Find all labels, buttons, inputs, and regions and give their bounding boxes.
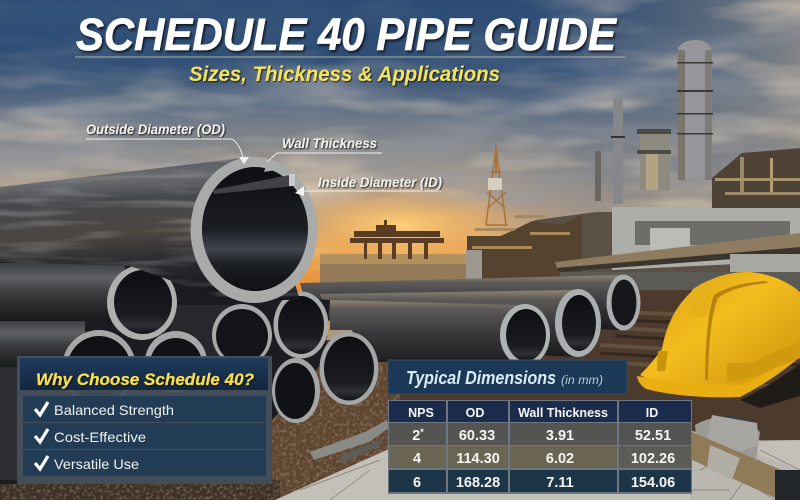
dark base behind stack xyxy=(0,255,330,484)
pipe end: NPS 4 xyxy=(212,304,272,366)
panel heading: typical dimensions: (in mm) xyxy=(561,375,603,387)
table row: NPS 2: 2 xyxy=(412,428,420,444)
pipe end: NPS 2 xyxy=(62,330,136,406)
reactor vessel xyxy=(637,129,671,190)
table row: NPS 2: 3.91 xyxy=(546,428,574,444)
table header row: NPS xyxy=(408,406,434,420)
pipe B xyxy=(320,289,601,357)
title: SCHEDULE 40 PIPE GUIDE xyxy=(76,9,618,60)
cutaway notch xyxy=(213,174,295,194)
pipe body middle xyxy=(170,305,230,365)
pipe end: NPS 7 xyxy=(272,358,320,423)
right structure xyxy=(712,148,800,208)
helmet slot xyxy=(657,351,668,371)
refinery base building xyxy=(466,212,800,290)
helmet dome xyxy=(640,272,800,391)
callout: inside diameter xyxy=(295,175,442,196)
panel heading: Why Choose Schedule 40? xyxy=(36,370,255,389)
table row: NPS 2: 52.51 xyxy=(635,428,671,444)
panel: why choose schedule 40 xyxy=(17,356,272,484)
table header row xyxy=(389,401,691,422)
panel heading: typical dimensions xyxy=(388,360,627,394)
benefit: versatile use: Versatile Use xyxy=(54,456,139,472)
main cutaway pipe xyxy=(0,155,318,305)
subtitle: Sizes, Thickness & Applications xyxy=(189,63,500,86)
panel heading: typical dimensions: Typical Dimensions xyxy=(406,368,556,388)
helmet raised rib xyxy=(689,279,714,317)
benefit: balanced strength xyxy=(23,396,266,422)
pipe end: NPS 3 xyxy=(145,331,207,393)
benefit: cost-effective xyxy=(23,423,266,449)
pliers tool xyxy=(310,420,389,463)
stack 2 xyxy=(611,96,625,204)
small pipes stack xyxy=(0,255,378,484)
table row: NPS 4: 6.02 xyxy=(546,451,574,467)
helmet shadow xyxy=(740,364,800,408)
callout: outside diameter xyxy=(86,122,249,164)
table row: NPS 6: 7.11 xyxy=(546,475,574,491)
table row: NPS 4 xyxy=(389,446,691,468)
table row: NPS 6: 154.06 xyxy=(631,475,675,491)
pipe end: NPS 5 xyxy=(274,292,328,358)
pipe end: NPS 1 xyxy=(107,265,177,340)
table row: NPS 2: 60.33 xyxy=(459,428,495,444)
benefit: versatile use xyxy=(23,450,266,476)
background pipes on the right xyxy=(0,274,640,500)
table row: NPS 6 xyxy=(389,470,691,492)
helmet brim xyxy=(637,349,800,397)
main pipe body xyxy=(0,157,300,300)
table row: NPS 6: 168.28 xyxy=(456,475,500,491)
benefit: balanced strength: Balanced Strength xyxy=(54,402,174,418)
callout: wall thickness xyxy=(267,136,382,162)
icon: yellow hard hat xyxy=(637,272,800,408)
pipe body row 2 xyxy=(0,263,125,321)
pipe body row 4 xyxy=(0,367,30,480)
callout: inside diameter: Inside Diameter (ID) xyxy=(318,175,442,190)
canopy beam xyxy=(555,233,800,268)
derrick xyxy=(486,145,508,225)
table header row: ID xyxy=(646,406,658,420)
helmet ridge xyxy=(705,281,768,380)
table: typical dimensions xyxy=(388,400,692,494)
dimension callouts xyxy=(86,122,442,196)
background: sea and offshore platform xyxy=(320,220,490,284)
pipe A xyxy=(330,300,550,366)
callout: outside diameter: Outside Diameter (OD) xyxy=(86,122,225,137)
table row: NPS 4: 102.26 xyxy=(631,451,675,467)
callout: wall thickness: Wall Thickness xyxy=(282,136,377,151)
dirt foreground under pipes xyxy=(0,362,400,500)
stack 3 xyxy=(595,151,601,201)
main pipe wall ring xyxy=(191,157,318,303)
wrench xyxy=(692,415,800,500)
pipe end: NPS 6 xyxy=(320,330,378,405)
table row: NPS 4: 114.30 xyxy=(456,451,500,467)
table row: NPS 2 xyxy=(389,423,691,445)
panel heading xyxy=(20,358,268,390)
ground xyxy=(270,290,800,500)
benefit: cost-effective: Cost-Effective xyxy=(54,429,146,445)
lower plant xyxy=(467,215,582,290)
table row: NPS 2: * xyxy=(420,427,424,437)
helmet side clip xyxy=(727,342,800,382)
pipe body row 3 xyxy=(0,321,85,368)
table header row: OD xyxy=(466,406,484,420)
table header row: Wall Thickness xyxy=(518,406,608,420)
background: refinery xyxy=(466,40,800,298)
tall column xyxy=(677,40,713,180)
table row: NPS 4: 4 xyxy=(413,451,421,467)
blueprint sheet and tools xyxy=(275,415,800,500)
table row: NPS 6: 6 xyxy=(413,475,421,491)
pipe C xyxy=(300,274,640,330)
blueprint xyxy=(275,430,800,500)
